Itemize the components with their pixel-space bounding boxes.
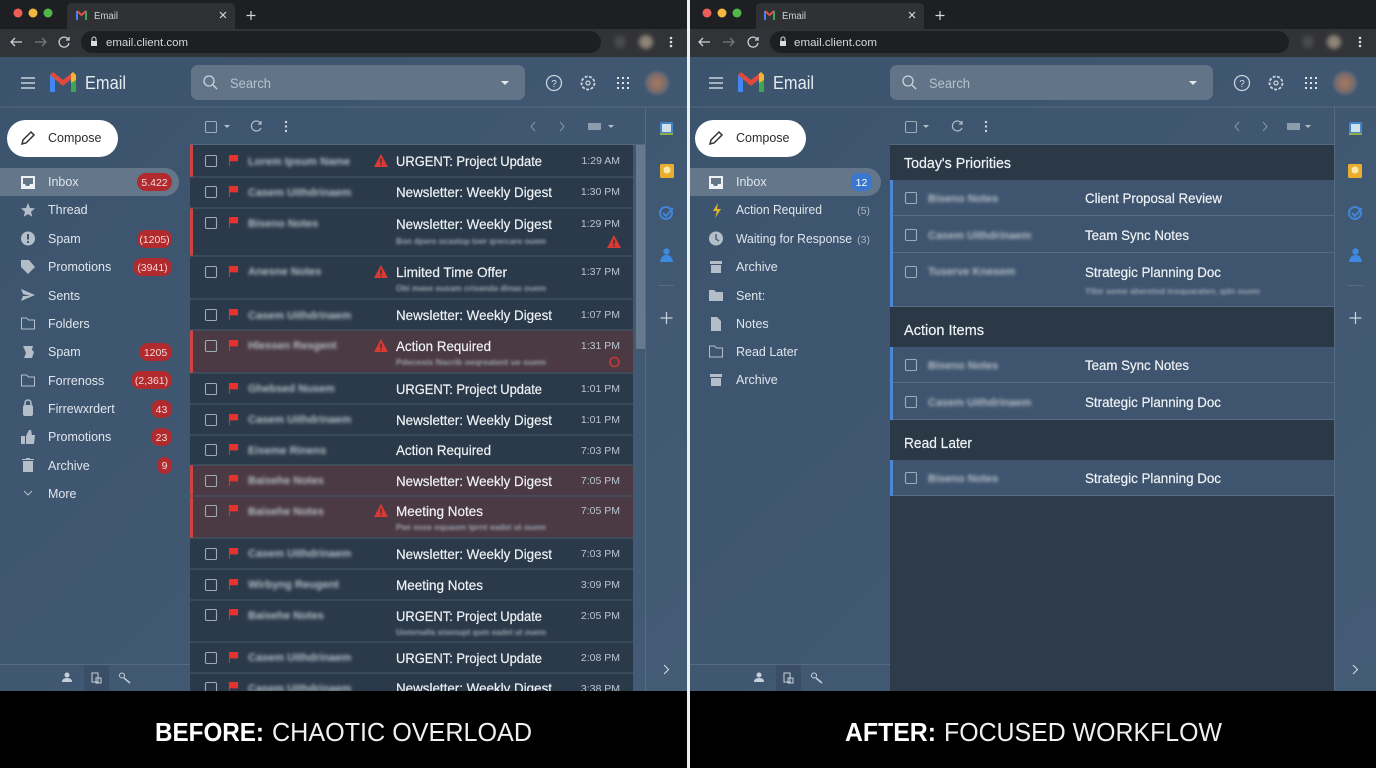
row: Team Sync Notes	[890, 216, 1334, 253]
email row: newsletter cut off: Newsletter: Weekly Digest	[396, 680, 552, 696]
pink row highlights	[190, 330, 633, 538]
nav: Sents: Sents	[48, 289, 80, 303]
email row: newsletter highlighted: 7:05 PM	[581, 475, 620, 487]
nav: Read Later: Read Later	[736, 345, 798, 359]
center divider	[687, 0, 690, 768]
nav: Archive: Archive	[48, 459, 90, 473]
app header: ?	[1239, 79, 1245, 90]
sidebar navigation	[690, 168, 881, 387]
icon: add	[660, 312, 672, 324]
email row: newsletter: Newsletter: Weekly Digest	[396, 412, 552, 428]
nav: Spam 2: 1205	[144, 347, 167, 359]
email row: URGENT	[206, 153, 620, 169]
email row: URGENT: Casem Uithdrinaem	[248, 652, 352, 664]
browser tab bar: Email	[94, 11, 118, 22]
nav: Action Required: (5)	[857, 205, 870, 217]
browser address bar	[0, 29, 687, 57]
compose button: Compose	[736, 131, 790, 145]
email row: action required: Action Required	[396, 442, 491, 458]
right app rail	[645, 107, 674, 691]
nav: Inbox	[709, 173, 872, 191]
email row: URGENT: URGENT: Project Update	[396, 381, 542, 397]
email row: newsletter cut off: 3:38 PM	[581, 683, 620, 695]
email row: meeting notes: Pwr esse equaom tprnt eadet ut ouem	[396, 522, 546, 532]
email row: URGENT	[206, 381, 620, 397]
email row: URGENT with snippet: Uomrnalla sisenupt qum eadet ut ouem	[396, 627, 546, 637]
nav: Spam 2	[23, 343, 172, 361]
section heading: Read Later	[890, 420, 1334, 460]
row: Client Proposal Review	[890, 180, 1334, 216]
nav: Sents	[21, 289, 80, 303]
email row: newsletter: Casem Uithdrinaem	[248, 310, 352, 322]
email row: newsletter: Casem Uithdrinaem	[248, 414, 352, 426]
row: Client Proposal Review: Biseno Notes	[928, 193, 998, 205]
email row: URGENT with snippet: URGENT: Project Update	[396, 608, 542, 624]
caption: before: CHAOTIC OVERLOAD	[272, 717, 532, 747]
email row: action required: 7:03 PM	[581, 445, 620, 457]
email row: newsletter highlighted	[206, 473, 620, 489]
email row: URGENT: URGENT: Project Update	[396, 153, 542, 169]
nav: Archive 2	[710, 373, 778, 387]
email row: newsletter cut off	[206, 680, 620, 696]
browser tab bar: Email	[782, 11, 806, 22]
email row: limited offer	[206, 264, 620, 293]
email row: URGENT: Lorem Ipsum Name	[248, 156, 350, 168]
email row: URGENT with snippet	[206, 608, 620, 637]
app header: Search	[929, 75, 970, 91]
caption: after: FOCUSED WORKFLOW	[944, 717, 1222, 747]
email row: URGENT: Ghebsed Nusem	[248, 383, 335, 395]
email row: meeting notes: Baisehe Notes	[248, 506, 324, 518]
email row: newsletter: Newsletter: Weekly Digest	[396, 307, 552, 323]
row: Strategic Planning Doc	[890, 253, 1334, 307]
email row: meeting notes: Wirbyng Reugent	[248, 579, 339, 591]
app header: ?	[551, 79, 557, 90]
icon: tasks	[1349, 207, 1362, 219]
row: Strategic Planning Doc: Strategic Planning Doc	[1085, 394, 1221, 410]
nav: Sent	[709, 289, 765, 303]
nav: Waiting for Response: (3)	[857, 234, 870, 246]
email row: meeting notes	[206, 503, 620, 532]
row: Strategic Planning Doc: Strategic Planning Doc	[1085, 264, 1221, 280]
nav: Inbox: 5.422	[141, 177, 168, 189]
browser address bar: email.client.com	[794, 37, 877, 49]
nav: Archive: Archive	[736, 260, 778, 274]
app header: Email	[773, 73, 814, 93]
email row: URGENT with snippet: Baisehe Notes	[248, 610, 324, 622]
nav: Inbox: Inbox	[48, 175, 79, 189]
nav: More: More	[48, 487, 77, 501]
nav: Spam: (1205)	[139, 234, 170, 246]
icon: mail logo	[738, 72, 764, 92]
email row: URGENT with snippet: 2:05 PM	[581, 610, 620, 622]
app header	[0, 65, 687, 108]
email row: meeting notes	[206, 577, 620, 593]
email row: newsletter highlighted: Baisehe Notes	[248, 475, 324, 487]
icon: calendar	[660, 122, 673, 135]
nav: Archive	[22, 457, 172, 474]
row: Team Sync Notes	[890, 347, 1334, 383]
email row: newsletter	[206, 546, 620, 562]
app header: Search	[230, 75, 271, 91]
row dividers	[190, 176, 633, 674]
browser address bar: email.client.com	[106, 37, 188, 49]
nav: Thread	[21, 203, 88, 217]
nav: Sent: Sent:	[736, 289, 765, 303]
row: Strategic Planning Doc	[890, 383, 1334, 420]
email row: newsletter: Casem Uithdrinaem	[248, 548, 352, 560]
nav: Firewxrdert	[23, 400, 172, 418]
urgent red markers	[190, 145, 193, 538]
email row: newsletter with snippet: Newsletter: Weekly Digest	[396, 216, 552, 232]
nav: Inbox	[21, 173, 172, 191]
icon: expand	[664, 665, 668, 674]
nav: Action Required: Action Required	[736, 203, 822, 217]
icon: contacts	[1349, 248, 1362, 262]
nav: Archive: 9	[162, 460, 168, 472]
nav: Inbox: Inbox	[736, 175, 767, 189]
nav: Notes: Notes	[736, 317, 769, 331]
icon: contacts	[660, 248, 673, 262]
right app rail	[1334, 107, 1363, 691]
email row: newsletter with snippet: Biseno Notes	[248, 218, 318, 230]
app header: Email	[85, 73, 126, 93]
nav: Forrenoss: (2,361)	[135, 375, 168, 387]
email row: newsletter highlighted: Newsletter: Weekly Digest	[396, 473, 552, 489]
email row: action required: Hlessen Resgent	[248, 340, 337, 352]
email row: limited offer: Limited Time Offer	[396, 264, 507, 280]
section heading: Today's Priorities: Today's Priorities	[904, 156, 1011, 172]
sidebar navigation	[0, 168, 179, 501]
nav: Firewxrdert: Firrewxrdert	[48, 402, 115, 416]
row: Strategic Planning Doc: Casem Uithdrinaem	[928, 397, 1032, 409]
row: Team Sync Notes: Team Sync Notes	[1085, 357, 1189, 373]
email row: URGENT: 2:08 PM	[581, 652, 620, 664]
nav: Folders: Folders	[48, 317, 90, 331]
row: Strategic Planning Doc: Ylbir seme aberetsd insquaraten, qdn ouem	[1085, 286, 1260, 296]
email row: newsletter: 1:07 PM	[581, 309, 620, 321]
icon: keep	[1348, 164, 1362, 178]
email row: meeting notes: 3:09 PM	[581, 579, 620, 591]
icon: expand	[1353, 665, 1358, 674]
row: Client Proposal Review: Client Proposal Review	[1085, 190, 1223, 206]
caption: before: BEFORE:	[155, 717, 264, 747]
section heading: Read Later: Read Later	[904, 436, 972, 452]
email row: meeting notes: Meeting Notes	[396, 503, 483, 519]
nav: Notes	[711, 317, 769, 331]
nav: Promotions 2: Promotions	[48, 430, 111, 444]
row: Team Sync Notes: Biseno Notes	[928, 360, 998, 372]
email row: action required: Action Required	[396, 338, 491, 354]
email row: newsletter: Casem Uithdrinaem	[248, 187, 352, 199]
nav: Action Required	[713, 203, 870, 218]
email row: newsletter	[206, 184, 620, 200]
email row: action required	[206, 338, 620, 367]
caption: before	[0, 691, 687, 768]
compose button: Compose	[48, 131, 102, 145]
icon: tasks	[660, 207, 673, 219]
email row: action required: Eiseme Rinens	[248, 445, 326, 457]
browser tab bar	[690, 0, 1376, 29]
email row: URGENT: 1:29 AM	[581, 155, 620, 167]
email row: meeting notes: 7:05 PM	[581, 505, 620, 517]
email row: action required: 1:31 PM	[581, 340, 620, 352]
nav: Spam 2: Spam	[48, 345, 81, 359]
email row: newsletter with snippet	[206, 216, 621, 248]
organized list	[890, 145, 1334, 691]
email row: newsletter	[206, 307, 620, 323]
row: Strategic Planning Doc: Tuserve Knesem	[928, 266, 1015, 278]
email row: limited offer: Obi mase ousam crisanda dinas ouem	[396, 283, 546, 293]
email row: URGENT: URGENT: Project Update	[396, 650, 542, 666]
email row: newsletter: 1:01 PM	[581, 414, 620, 426]
row: Strategic Planning Doc: Biseno Notes	[928, 473, 998, 485]
email row: URGENT	[206, 650, 620, 666]
nav: Forrenoss: Forrenoss	[48, 374, 104, 388]
section heading: Action Items	[890, 307, 1334, 347]
row: Team Sync Notes: Team Sync Notes	[1085, 227, 1189, 243]
browser tab bar	[0, 0, 687, 29]
list toolbar	[890, 121, 1334, 145]
nav: Spam: Spam	[48, 232, 81, 246]
email row: newsletter: 1:30 PM	[581, 186, 620, 198]
email row: newsletter: Newsletter: Weekly Digest	[396, 546, 552, 562]
email row: newsletter cut off: Casem Uithdrinaem	[248, 683, 352, 695]
nav: Promotions	[21, 258, 172, 276]
section heading: Today's Priorities	[890, 145, 1334, 180]
icon: keep	[660, 164, 674, 178]
icon: calendar	[1349, 122, 1362, 135]
nav: Promotions: (3941)	[137, 262, 168, 274]
nav: More	[24, 487, 77, 501]
nav: Archive 2: Archive	[736, 373, 778, 387]
icon: add	[1350, 312, 1362, 324]
email row: newsletter with snippet: Bon dpero ocastop toer qrercaro ouem	[396, 236, 546, 246]
email row: limited offer: 1:37 PM	[581, 266, 620, 278]
panel: after	[690, 0, 1376, 691]
list toolbar	[190, 121, 645, 145]
compose button	[695, 120, 806, 157]
nav: Spam	[21, 230, 172, 248]
nav: Thread: Thread	[48, 203, 88, 217]
sidebar footer	[690, 664, 890, 691]
email row: newsletter	[206, 412, 620, 428]
email list	[190, 145, 633, 696]
nav: Inbox: 12	[856, 177, 867, 189]
panel: before	[0, 0, 687, 696]
nav: Folders	[22, 317, 90, 331]
row: Strategic Planning Doc	[890, 460, 1334, 496]
icon: mail logo	[50, 72, 76, 92]
email row: newsletter: Newsletter: Weekly Digest	[396, 184, 552, 200]
app header	[690, 65, 1376, 108]
nav: Forrenoss	[22, 371, 172, 389]
section heading: Action Items: Action Items	[904, 323, 984, 339]
row: Team Sync Notes: Casem Uithdrinaem	[928, 230, 1032, 242]
row: Strategic Planning Doc: Strategic Planning Doc	[1085, 470, 1221, 486]
sidebar footer	[0, 664, 190, 691]
nav: Waiting for Response: Waiting for Response	[736, 232, 852, 246]
email row: meeting notes: Meeting Notes	[396, 577, 483, 593]
compose button	[7, 120, 118, 157]
email row: newsletter: 7:03 PM	[581, 548, 620, 560]
nav: Promotions 2: 23	[156, 432, 167, 444]
email row: newsletter with snippet: 1:29 PM	[581, 218, 620, 230]
browser address bar	[690, 29, 1376, 57]
nav: Promotions: Promotions	[48, 260, 111, 274]
email row: action required	[206, 442, 620, 458]
email row: action required: Pdecesis Nacrib oeqreatent ue ouem	[396, 357, 546, 367]
email row: URGENT: 1:01 PM	[581, 383, 620, 395]
caption: after	[690, 691, 1376, 768]
nav: Promotions 2	[21, 428, 172, 446]
email row: limited offer: Anesne Notes	[248, 266, 321, 278]
scrollbar	[636, 145, 645, 349]
nav: Archive	[710, 260, 778, 274]
nav: Firewxrdert: 43	[156, 404, 167, 416]
caption: after: AFTER:	[845, 717, 936, 747]
